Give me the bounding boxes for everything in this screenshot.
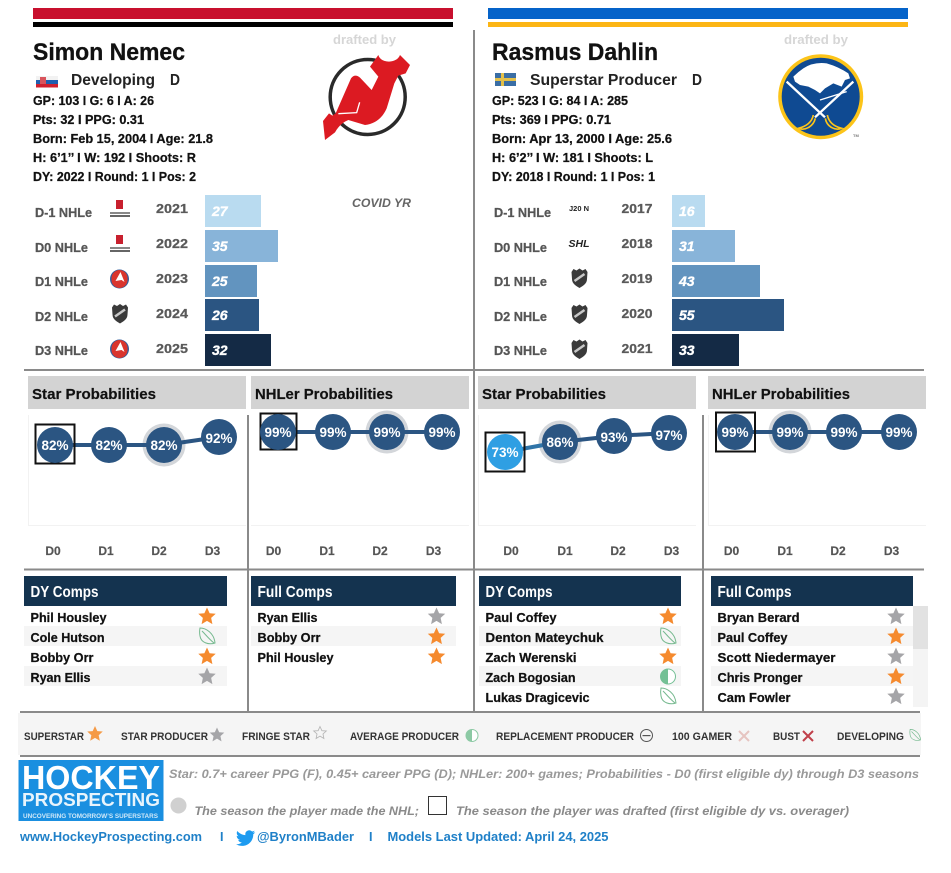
stats: Simon Nemec [33,94,213,184]
panel: Rasmus Dahlin Star Probabilities: Star Probabilities [482,386,606,403]
bar chart: 33 [679,342,695,358]
row labels: D1 NHLe [494,275,547,289]
COVID YR note: COVID YR [352,196,411,210]
logo: Buffalo Sabres [778,54,863,139]
league icons: SHL [568,239,590,250]
flag: Sweden [495,73,516,86]
footer links: Models Last Updated: April 24, 2025 [388,830,609,844]
panel: Simon Nemec NHLer Probabilities: D2 [372,544,388,558]
row labels: D0 NHLe [35,241,88,255]
panel: Rasmus Dahlin NHLer Probabilities: D0 [724,544,739,558]
panel: Simon Nemec Full Comps [251,576,456,665]
status: Superstar Producer D: D [692,72,702,89]
panel: Simon Nemec Star Probabilities: D0 [45,544,61,558]
footer links: www.HockeyProspecting.com [19,830,202,844]
player name: Rasmus Dahlin: Rasmus Dahlin [492,39,658,66]
logo: Hockey Prospecting: HOCKEY [22,759,160,796]
row labels: D2 NHLe [494,310,547,324]
logo: Hockey Prospecting: PROSPECTING [22,790,160,810]
bar chart: 27 [211,203,229,219]
logo: Hockey Prospecting: UNCOVERING TOMORROW’S SUPERSTARS [23,813,159,820]
stats: Rasmus Dahlin: H: 6’2’’ I W: 181 I Shoots: L [492,151,653,165]
bar chart: 32 [212,342,228,358]
bar chart: 16 [679,203,695,219]
stats: Simon Nemec: DY: 2022 I Round: 1 I Pos: 2 [33,170,196,184]
stats: Rasmus Dahlin: GP: 523 I G: 84 I A: 285 [492,94,628,108]
panel: Simon Nemec NHLer Probabilities: NHLer Probabilities [255,386,393,403]
panel: Rasmus Dahlin DY Comps [479,576,681,705]
legend: 100 GAMER [672,731,732,743]
player name: Simon Nemec: Simon Nemec [33,39,185,66]
panel: Simon Nemec Star Probabilities: 82% [41,438,69,453]
panel: Simon Nemec Star Probabilities: D1 [98,544,114,558]
panel: Rasmus Dahlin DY Comps: Denton Mateychuk [486,631,604,645]
panel: Simon Nemec Star Probabilities: 82% [150,438,178,453]
panel: Rasmus Dahlin DY Comps: Lukas Dragicevic [486,691,590,705]
status: Developing D: D [170,72,180,89]
panel: Rasmus Dahlin NHLer Probabilities: D1 [777,544,793,558]
panel: Simon Nemec Star Probabilities [28,376,246,558]
bar chart [672,195,784,366]
row labels: D3 NHLe [494,344,547,358]
league icons: J20 N [569,206,589,213]
panel: Simon Nemec NHLer Probabilities: 99% [428,425,456,440]
panel: Simon Nemec Star Probabilities: Star Probabilities [32,386,156,403]
bar chart: 35 [212,238,228,254]
legend: FRINGE STAR [242,731,310,743]
panel: Rasmus Dahlin Full Comps: Scott Niedermayer [718,651,836,665]
years: 2020 [622,307,653,321]
panel: Rasmus Dahlin Full Comps: Cam Fowler [718,691,791,705]
footer links: @ByronMBader [257,830,354,844]
stats: Simon Nemec: Pts: 32 I PPG: 0.31 [33,113,144,127]
years [156,202,188,356]
years: 2024 [156,307,188,321]
years: 2022 [156,237,188,251]
panel: Rasmus Dahlin Star Probabilities: 73% [491,445,519,460]
footer links: I [220,830,223,844]
logo: New Jersey Devils [323,55,410,140]
panel: Simon Nemec Full Comps: Full Comps [258,584,332,601]
key: season drafted: The season the player was drafted (first eligible dy vs. overager) [456,804,849,818]
panel: Rasmus Dahlin DY Comps: DY Comps [486,584,552,601]
legend: REPLACEMENT PRODUCER [496,731,634,743]
stats: Simon Nemec: Born: Feb 15, 2004 I Age: 21.8 [33,132,213,146]
logo: Hockey Prospecting [18,759,164,821]
panel: Simon Nemec DY Comps: DY Comps [30,584,98,601]
panel: Rasmus Dahlin Full Comps: Chris Pronger [718,671,803,685]
row labels: D-1 NHLe [494,206,551,220]
panel: Rasmus Dahlin NHLer Probabilities: 99% [776,425,804,440]
bar chart: 55 [679,307,695,323]
panel: Simon Nemec NHLer Probabilities [251,376,469,558]
years: 2019 [622,272,653,286]
panel: Simon Nemec DY Comps [24,576,227,686]
panel: Rasmus Dahlin Full Comps: Bryan Berard [718,611,800,625]
panel: Rasmus Dahlin Star Probabilities [478,376,696,558]
years: 2018 [622,237,653,251]
panel: Simon Nemec NHLe [35,195,278,366]
footer links [19,830,609,846]
panel: Rasmus Dahlin Star Probabilities: 97% [655,428,683,443]
panel: Rasmus Dahlin Star Probabilities: 93% [600,430,628,445]
panel: Rasmus Dahlin NHLer Probabilities: 99% [830,425,858,440]
panel: Simon Nemec DY Comps: Phil Housley [30,611,107,625]
bar chart: 26 [211,307,228,323]
row labels: D0 NHLe [494,241,547,255]
legend: SUPERSTAR [24,731,84,743]
panel: Rasmus Dahlin NHLer Probabilities [708,376,926,558]
row labels: D1 NHLe [35,275,88,289]
years: 2021 [156,202,188,216]
divider lines [24,30,924,711]
footer links: I [369,830,372,844]
bar chart: 43 [678,273,695,289]
row labels [35,206,92,358]
row labels: D3 NHLe [35,344,88,358]
stats: Rasmus Dahlin: Pts: 369 I PPG: 0.71 [492,113,611,127]
bar chart: 31 [679,238,695,254]
legend: STAR PRODUCER [121,731,208,743]
panel: Simon Nemec Star Probabilities: D2 [151,544,167,558]
stats: Rasmus Dahlin: Born: Apr 13, 2000 I Age: 25.6 [492,132,672,146]
panel: Simon Nemec NHLer Probabilities: D0 [266,544,281,558]
stats: Rasmus Dahlin [492,94,672,184]
panel: Rasmus Dahlin Star Probabilities: D0 [503,544,519,558]
bar chart: 25 [211,273,228,289]
panel: Rasmus Dahlin Star Probabilities: 86% [546,435,574,450]
key: season made NHL: The season the player made the NHL; [194,804,419,818]
panel: Rasmus Dahlin NHLer Probabilities: NHLer Probabilities [712,386,850,403]
panel: Rasmus Dahlin DY Comps: Zach Werenski [486,651,576,665]
stats: Simon Nemec: GP: 103 I G: 6 I A: 26 [33,94,154,108]
drafted by label right: drafted by [784,32,849,47]
league icons [110,200,130,358]
drafted by label left: drafted by [333,32,397,47]
panel: Rasmus Dahlin NHLer Probabilities: D3 [884,544,899,558]
row labels: D-1 NHLe [35,206,92,220]
panel: Simon Nemec Star Probabilities: 92% [205,431,233,446]
key: season drafted [428,796,849,818]
panel: Rasmus Dahlin Full Comps [711,576,928,707]
panel: Rasmus Dahlin DY Comps: Paul Coffey [486,611,557,625]
league icons [568,206,590,359]
status: Superstar Producer D: Superstar Producer [530,72,677,89]
key: season made NHL [170,798,419,818]
panel: Simon Nemec Full Comps: Ryan Ellis [258,611,318,625]
years [622,202,653,356]
panel: Rasmus Dahlin Star Probabilities: D1 [557,544,573,558]
panel: Simon Nemec Full Comps: Bobby Orr [258,631,321,645]
panel: Simon Nemec Star Probabilities: 82% [95,438,123,453]
panel: Simon Nemec DY Comps: Bobby Orr [30,651,94,665]
panel: Rasmus Dahlin Star Probabilities: D2 [610,544,626,558]
panel: Rasmus Dahlin Star Probabilities: D3 [664,544,679,558]
definitions note: Star: 0.7+ career PPG (F), 0.45+ career PPG (D); NHLer: 200+ games; Probabilities - D0 (first eligible dy) through D3 seasons [169,767,919,781]
years: 2021 [622,342,653,356]
panel: Simon Nemec NHLer Probabilities: 99% [373,425,401,440]
panel: Simon Nemec Star Probabilities: D3 [205,544,220,558]
stats: Rasmus Dahlin: DY: 2018 I Round: 1 I Pos: 1 [492,170,655,184]
years: 2023 [156,272,188,286]
row labels [494,206,551,358]
years: 2025 [156,342,188,356]
panel: Simon Nemec NHLer Probabilities: 99% [264,425,292,440]
right player header bars [488,8,908,27]
legend: DEVELOPING [837,731,904,743]
years: 2017 [622,202,653,216]
legend: BUST [773,731,800,743]
panel: Rasmus Dahlin NHLer Probabilities: 99% [885,425,913,440]
left player header bars [33,8,453,27]
panel: Simon Nemec NHLer Probabilities: D3 [426,544,441,558]
panel: Simon Nemec DY Comps: Ryan Ellis [30,671,91,685]
panel: Rasmus Dahlin DY Comps: Zach Bogosian [486,671,576,685]
panel: Simon Nemec Full Comps: Phil Housley [258,651,334,665]
legend [18,711,921,757]
stats: Simon Nemec: H: 6’1’’ I W: 192 I Shoots: R [33,151,196,165]
legend: AVERAGE PRODUCER [350,731,459,743]
row labels: D2 NHLe [35,310,88,324]
panel: Simon Nemec NHLer Probabilities: 99% [319,425,347,440]
panel: Rasmus Dahlin NHLer Probabilities: 99% [721,425,749,440]
panel: Simon Nemec DY Comps: Cole Hutson [30,631,104,645]
logo: Buffalo Sabres: TM [853,133,859,138]
panel: Rasmus Dahlin Full Comps: Full Comps [718,584,792,601]
panel: Rasmus Dahlin NHLer Probabilities: D2 [830,544,846,558]
status: Developing D: Developing [71,72,155,89]
panel: Rasmus Dahlin Full Comps: Paul Coffey [718,631,788,645]
flag: Slovakia [36,76,58,88]
panel: Rasmus Dahlin NHLe [494,195,784,366]
bar chart [205,195,278,366]
panel: Simon Nemec NHLer Probabilities: D1 [319,544,335,558]
